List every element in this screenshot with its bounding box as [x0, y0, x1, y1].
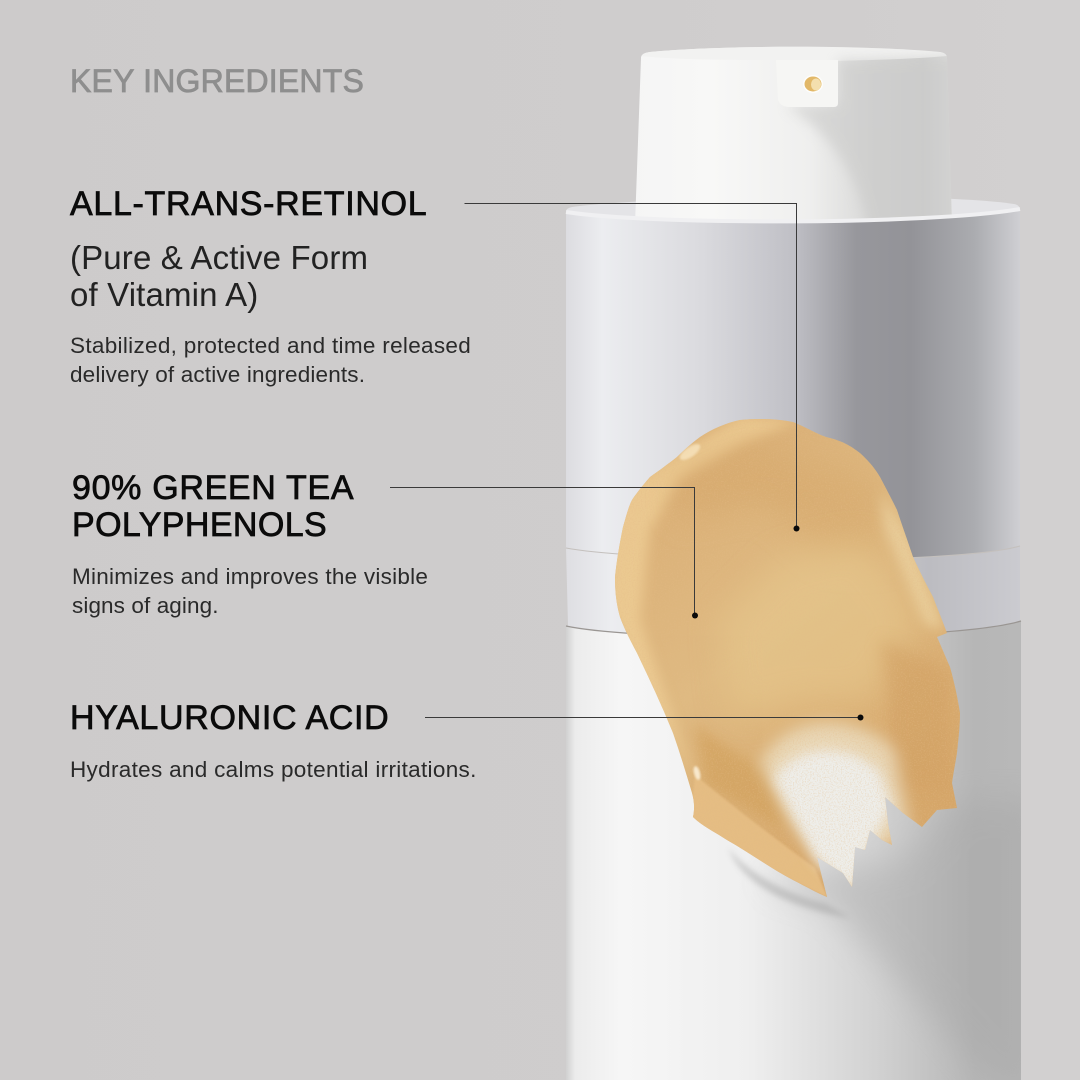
pump nozzle	[776, 60, 838, 107]
bottle collar rim back	[566, 197, 1020, 240]
heading: all-trans-retinol: ALL-TRANS-RETINOL	[70, 185, 427, 223]
swatch sheer foam area	[760, 723, 910, 900]
pump head	[636, 46, 952, 220]
text: retinol description: Stabilized, protected and time released	[70, 333, 471, 358]
heading: hyaluronic acid: HYALURONIC ACID	[70, 699, 389, 737]
text: retinol description	[70, 333, 471, 387]
text: hyaluronic acid description: Hydrates and calms potential irritations.	[70, 757, 477, 782]
product photo: bottle with serum swatch	[390, 46, 1021, 1080]
swatch front lobe	[690, 775, 828, 898]
heading: green tea polyphenols	[72, 469, 354, 544]
text: retinol description: delivery of active ingredients.	[70, 362, 365, 387]
serum swatch	[615, 419, 960, 897]
leader line: all-trans-retinol	[464, 204, 800, 532]
subheading: vitamin A form: of Vitamin A)	[70, 276, 258, 313]
bottle upper collar	[566, 209, 1020, 562]
swatch highlights and shading	[615, 419, 788, 738]
heading: green tea polyphenols: POLYPHENOLS	[72, 506, 327, 544]
text: green tea description	[72, 564, 428, 618]
text: green tea description: Minimizes and improves the visible	[72, 564, 428, 589]
title: KEY INGREDIENTS	[70, 63, 364, 99]
subheading: vitamin A form: (Pure & Active Form	[70, 239, 368, 276]
bottle lower body	[566, 621, 1040, 1080]
subheading: vitamin A form	[70, 239, 368, 313]
leader line: green tea polyphenols	[390, 488, 698, 618]
leader line: hyaluronic acid	[425, 714, 864, 720]
bottle middle band	[566, 546, 1020, 641]
heading: green tea polyphenols: 90% GREEN TEA	[72, 469, 354, 507]
text: green tea description: signs of aging.	[72, 593, 219, 618]
